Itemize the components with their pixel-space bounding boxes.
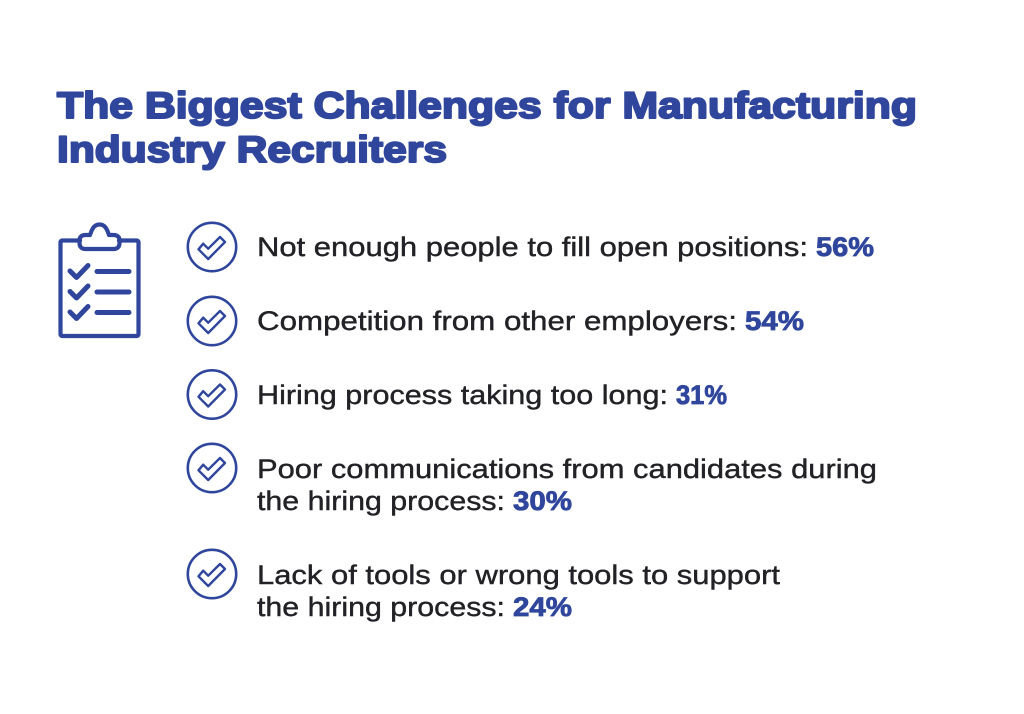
item: competition: 54% — [745, 306, 804, 336]
title — [57, 84, 917, 170]
title: Industry Recruiters — [57, 128, 447, 170]
item: lack of tools: Lack of tools or wrong tools to support — [257, 560, 781, 590]
item: lack of tools — [188, 550, 781, 622]
item: hiring process too long: Hiring process taking too long: — [257, 380, 668, 410]
item: poor communications: Poor communications from candidates during — [257, 454, 877, 484]
icon: clipboard — [60, 224, 138, 336]
item: hiring process too long — [188, 370, 727, 419]
title: The Biggest Challenges for Manufacturing — [57, 84, 917, 126]
item: not enough people: Not enough people to fill open positions: — [257, 232, 808, 262]
item: lack of tools: the hiring process: — [257, 592, 505, 622]
item: poor communications — [188, 444, 877, 516]
item: poor communications: the hiring process: — [257, 486, 505, 516]
item: hiring process too long: 31% — [676, 380, 727, 410]
item: lack of tools: 24% — [513, 592, 572, 622]
item: poor communications: 30% — [513, 486, 572, 516]
item: not enough people — [188, 223, 874, 271]
item: competition: Competition from other employers: — [257, 306, 737, 336]
item: competition — [188, 297, 804, 345]
item: not enough people: 56% — [816, 232, 874, 262]
